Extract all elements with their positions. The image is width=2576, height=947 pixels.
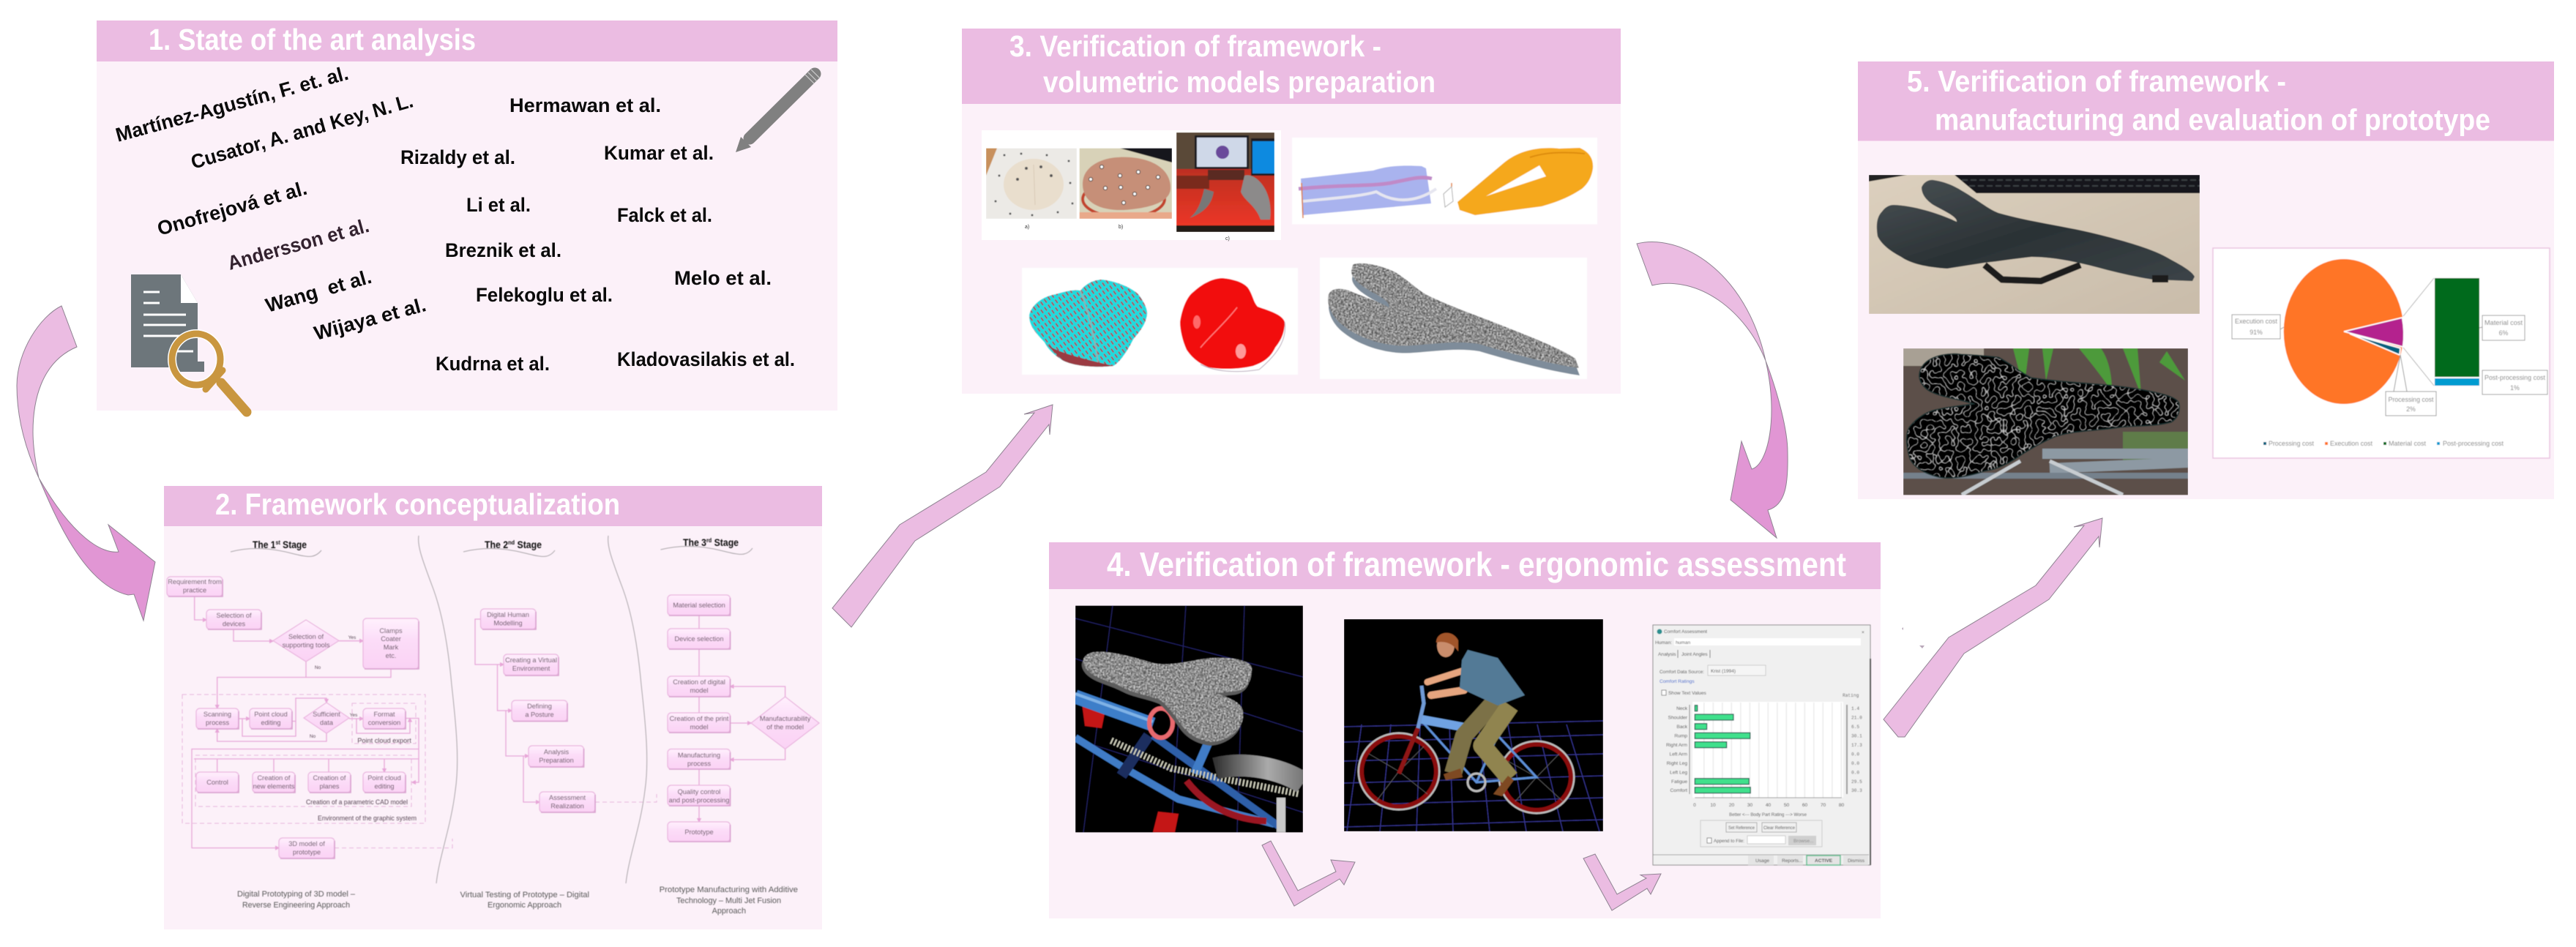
screenshot: comfort assessment window: 60 — [1802, 803, 1807, 808]
chart: cost breakdown pie with bar of pie — [2213, 248, 2550, 458]
screenshot: comfort assessment window: 29.5 — [1851, 779, 1862, 785]
screenshot: comfort assessment window: 50 — [1784, 803, 1789, 808]
photo c: scanner setup with monitors — [1176, 132, 1274, 232]
cited authors: Cusator, A. and Key, N. L. — [188, 89, 416, 173]
screenshot: comfort assessment window: Back — [1676, 725, 1688, 730]
screenshot: comfort assessment window: 17.3 — [1851, 743, 1862, 748]
cited authors: Felekoglu et al. — [476, 284, 613, 306]
stage 1: No — [315, 665, 321, 670]
stage 3: and post-processing — [669, 796, 729, 804]
cited authors: Kumar et al. — [604, 142, 714, 164]
screenshot: comfort assessment window: Set Reference — [1728, 826, 1755, 831]
stage 1: Coater — [381, 635, 401, 643]
screenshot: comfort assessment window: human — [1676, 640, 1690, 645]
stage 2 — [460, 539, 657, 910]
cited authors: Hermawan et al. — [509, 94, 661, 116]
panel 2: framework conceptualization — [164, 486, 822, 929]
stage 3: Prototype Manufacturing with Additive — [660, 886, 798, 894]
stage 1: Scanning — [204, 711, 231, 718]
pie slices — [2284, 259, 2404, 404]
screenshot: comfort assessment window: 20 — [1729, 803, 1734, 808]
stray arrow fragments — [1902, 627, 1924, 648]
cited authors: Martínez-Agustín, F. et. al. — [113, 62, 351, 146]
stage 1: etc. — [386, 652, 396, 659]
screenshot: comfort assessment window: Clear Reference — [1763, 826, 1795, 831]
stage 1: editing — [261, 719, 281, 726]
arrow: small bent arrow 1 — [1262, 841, 1355, 906]
stage 3 — [660, 537, 819, 916]
stage 1: planes — [319, 783, 340, 790]
screenshot: comfort assessment window: Neck — [1676, 706, 1688, 711]
cited authors: Breznik et al. — [445, 239, 561, 261]
stage 2: nd — [508, 539, 515, 546]
stage 2: Virtual Testing of Prototype – Digital — [460, 891, 589, 899]
stage 1: conversion — [368, 719, 400, 726]
screenshot: comfort assessment window: Comfort Ratings — [1660, 679, 1695, 684]
screenshot: comfort assessment window: Right Arm — [1666, 743, 1688, 748]
screenshot: comfort assessment window: 30 — [1747, 803, 1752, 808]
data callouts: 1% — [2510, 384, 2520, 392]
stage 2: Stage — [515, 539, 542, 550]
figure: grey lattice saddle model — [1320, 258, 1587, 379]
data callouts: 6% — [2499, 329, 2509, 337]
stage 3: of the model — [766, 723, 804, 730]
stage 2: Defining — [527, 703, 552, 710]
screenshot: comfort assessment window: Comfort Data Source: — [1660, 670, 1704, 675]
stage 1 — [167, 539, 452, 910]
stage 1: Point cloud — [367, 774, 401, 782]
stage 1: Control — [206, 779, 228, 786]
stage 1: prototype — [293, 849, 321, 856]
stage 3: Quality control — [678, 788, 720, 796]
cited authors: Falck et al. — [617, 204, 712, 226]
screenshot: comfort assessment window: 10 — [1710, 803, 1716, 808]
figure: cyan mesh and red shell — [1022, 268, 1298, 375]
stage 1: The 1 — [253, 539, 278, 550]
screenshot: comfort assessment window: 21.0 — [1851, 716, 1862, 720]
panel 3 heading bar: volumetric models preparation — [1043, 65, 1436, 99]
stage 1: Creation of a parametric CAD model — [306, 798, 408, 806]
divider between stage 1 and 2 — [419, 536, 458, 883]
stage 3: Technology – Multi Jet Fusion — [676, 897, 781, 905]
stage 2: Environment — [512, 665, 550, 672]
figure: CAD block and orange saddle — [1292, 138, 1597, 224]
stage 2: a Posture — [525, 711, 554, 719]
stage 1: Yes — [350, 713, 358, 718]
screenshot: comfort assessment window — [1653, 625, 1870, 865]
arrow: curved arrow from panel 1 to panel 2 — [17, 306, 155, 621]
chart legend — [2263, 440, 2504, 447]
stage 3: model — [690, 723, 709, 730]
stage 1: Point cloud — [254, 711, 288, 718]
stage 1: Sufficient — [313, 711, 340, 718]
comfort rating bars — [1695, 705, 1750, 793]
stage 2: Preparation — [539, 757, 574, 764]
chart legend: Material cost — [2389, 440, 2427, 447]
screenshot: comfort assessment window: 0.0 — [1851, 770, 1859, 776]
screenshot: comfort assessment window: Rating — [1843, 693, 1859, 698]
screenshot: comfort assessment window: 30.3 — [1851, 788, 1862, 793]
stage 1: Environment of the graphic system — [318, 815, 417, 822]
arrow: panel 2 to panel 3 — [832, 405, 1053, 627]
screenshot: comfort assessment window: 0.0 — [1851, 761, 1859, 766]
screenshot: comfort assessment window: Left Leg — [1670, 770, 1687, 776]
panel 3: volumetric models preparation — [962, 29, 1621, 394]
data callouts: 91% — [2250, 329, 2263, 336]
stage 1: Requirement from — [168, 578, 222, 585]
stage 1: data — [320, 719, 334, 726]
cited authors: Onofrejová et al. — [155, 177, 310, 240]
stage 2: Ergonomic Approach — [488, 901, 561, 910]
stage 3: rd — [706, 537, 712, 544]
cited authors: Melo et al. — [674, 267, 772, 289]
stage 1: 3D model of — [288, 840, 325, 847]
stage 3: Creation of the print — [670, 715, 729, 722]
screenshot: comfort assessment window: 1.4 — [1851, 706, 1859, 711]
icon: document and magnifying glass — [131, 274, 247, 412]
stage 1: Clamps — [379, 627, 403, 635]
panel 3 heading bar — [962, 29, 1621, 104]
cited authors: Rizaldy et al. — [400, 146, 515, 168]
stage 1: process — [206, 719, 229, 726]
photo: smooth black saddle on desk — [1869, 175, 2200, 314]
flowchart: three stages — [167, 536, 819, 916]
icon: pencil — [736, 70, 820, 152]
stage 1: Stage — [280, 539, 307, 550]
panel 4: ergonomic assessment — [1049, 542, 1881, 918]
screenshot: comfort assessment window: × — [1862, 630, 1864, 635]
stage 1: devices — [223, 621, 245, 628]
cited authors: Wijaya et al. — [312, 293, 428, 345]
stage 3: The 3 — [683, 537, 709, 548]
data callouts — [2232, 315, 2547, 416]
arrow: small bent arrow 2 — [1583, 854, 1661, 910]
panel 1: state of the art analysis — [97, 20, 837, 412]
screenshot: comfort assessment window: Shoulder — [1668, 716, 1688, 720]
divider between stage 2 and 3 — [608, 536, 647, 883]
chart legend: Execution cost — [2330, 440, 2373, 447]
screenshot: comfort assessment window: Dismiss — [1848, 858, 1865, 864]
stage 3: Approach — [712, 907, 746, 916]
stage 3: Manufacturability — [760, 715, 811, 722]
screenshot: comfort assessment window: Krist (1994) — [1711, 669, 1736, 674]
screenshot: comfort assessment window: Browse... — [1793, 839, 1814, 844]
stage 1: Creation of — [313, 774, 346, 782]
stage 1: Selection of — [288, 633, 324, 640]
stage 1: Creation of — [258, 774, 291, 782]
screenshot: comfort assessment window: 30.1 — [1851, 733, 1862, 739]
stage 1: Digital Prototyping of 3D model – — [237, 890, 356, 899]
stage 3: Material selection — [673, 602, 725, 609]
stage 3: model — [690, 686, 709, 694]
data callouts: Execution cost — [2235, 318, 2278, 325]
screenshot: comfort assessment window: Fatigue — [1671, 779, 1687, 785]
stacked bar of pie — [2403, 278, 2479, 386]
stage 1: Yes — [348, 635, 356, 640]
image: digital human riding bicycle — [1344, 619, 1603, 831]
screenshot: comfort assessment window: Rump — [1674, 733, 1687, 739]
arrow: panel 4 to panel 5 — [1884, 518, 2102, 737]
photo a: saddle mould on marker sheet — [986, 148, 1077, 219]
stage 3: Device selection — [675, 635, 723, 643]
stage 3: Manufacturing — [678, 752, 720, 759]
screenshot: comfort assessment window: Right Leg — [1667, 761, 1687, 766]
stage 1: Point cloud export — [357, 737, 411, 744]
data callouts: 2% — [2406, 405, 2416, 413]
screenshot: comfort assessment window: ACTIVE — [1815, 858, 1833, 864]
stage 1: Format — [373, 711, 395, 718]
stage 3: Creation of digital — [673, 678, 725, 686]
screenshot: comfort assessment window: Analysis — [1658, 652, 1676, 657]
stage 1: st — [275, 539, 280, 546]
stage 2: Creating a Virtual — [505, 656, 557, 664]
screenshot: comfort assessment window: Usage — [1755, 858, 1769, 864]
figure: scanning photos a, b, c: b) — [1119, 225, 1123, 230]
stage 2: Digital Human — [487, 611, 529, 618]
screenshot: comfort assessment window: Left Arm — [1669, 752, 1687, 757]
screenshot: comfort assessment window: 70 — [1821, 803, 1826, 808]
image: saddle mounted on bicycle frame — [1075, 605, 1303, 833]
cited authors — [113, 62, 795, 375]
figure: scanning photos a, b, c: a) — [1025, 225, 1029, 230]
data callouts: Processing cost — [2388, 396, 2434, 403]
stage 2: The 2 — [485, 539, 510, 550]
screenshot: comfort assessment window: Reports... — [1782, 858, 1803, 864]
stage 1: supporting tools — [283, 641, 330, 648]
cited authors: Wang et al. — [263, 266, 374, 317]
figure: scanning photos a, b, c — [982, 130, 1281, 242]
stage 2: Assessment — [549, 794, 586, 801]
screenshot: comfort assessment window: Human: — [1655, 640, 1672, 645]
figure: scanning photos a, b, c: c) — [1225, 236, 1230, 242]
cited authors: Kudrna et al. — [436, 353, 550, 375]
stage 1: Reverse Engineering Approach — [242, 901, 350, 910]
cited authors: Andersson et al. — [225, 214, 371, 274]
stage 1: practice — [183, 587, 206, 594]
stage 1: Selection of — [216, 612, 252, 619]
panel 2 heading bar — [164, 486, 822, 526]
cited authors: Kladovasilakis et al. — [617, 348, 795, 370]
photo b: painted saddle mould with targets — [1079, 148, 1172, 219]
stage 1: Mark — [384, 644, 399, 651]
stage 3: process — [687, 760, 711, 767]
screenshot: comfort assessment window: 80 — [1839, 803, 1844, 808]
screenshot: comfort assessment window: 40 — [1766, 803, 1771, 808]
chart legend: Processing cost — [2269, 440, 2315, 447]
panel 1 heading bar: 1. State of the art analysis — [149, 23, 476, 56]
screenshot: comfort assessment window: Better <--- Body Part Rating ---> Worse — [1729, 812, 1807, 817]
screenshot: comfort assessment window: Show Text Values — [1668, 691, 1707, 696]
screenshot: comfort assessment window: Comfort Assessment — [1664, 629, 1707, 635]
screenshot: comfort assessment window: Joint Angles — [1681, 652, 1708, 657]
data callouts: Post-processing cost — [2484, 374, 2546, 381]
photo: lattice saddle on bicycle — [1903, 348, 2188, 495]
arrow: curved arrow from panel 3 to panel 4 — [1637, 242, 1788, 538]
screenshot: comfort assessment window: Append to File: — [1714, 839, 1744, 844]
panel 5 heading bar: 5. Verification of framework - — [1907, 64, 2286, 98]
panel 5 heading bar: manufacturing and evaluation of prototype — [1935, 102, 2490, 136]
stage 3: Stage — [712, 537, 739, 548]
stage 1: No — [310, 734, 316, 739]
screenshot: comfort assessment window: 0.0 — [1851, 752, 1859, 757]
stage 2: Realization — [550, 802, 584, 809]
panel 1 heading bar — [97, 20, 837, 61]
stage 1: new elements — [253, 783, 295, 790]
stage 2: Modelling — [493, 619, 523, 626]
screenshot: comfort assessment window: Comfort — [1670, 788, 1687, 793]
data callouts: Material cost — [2484, 319, 2523, 326]
stage 2: Analysis — [544, 748, 570, 755]
screenshot: comfort assessment window: 0 — [1693, 803, 1696, 808]
panel 3 heading bar: 3. Verification of framework - — [1009, 29, 1381, 63]
screenshot: comfort assessment window: 6.5 — [1851, 725, 1859, 730]
chart legend: Post-processing cost — [2443, 440, 2504, 447]
stage 3: Prototype — [684, 828, 714, 836]
panel 5 heading bar — [1858, 61, 2554, 141]
cited authors: Li et al. — [466, 194, 531, 216]
panel 2 heading bar: 2. Framework conceptualization — [215, 487, 620, 521]
stage 1: editing — [374, 783, 395, 790]
panel 4 heading bar: 4. Verification of framework - ergonomic assessment — [1107, 545, 1846, 583]
panel 5: manufacturing and evaluation of prototype — [1858, 61, 2554, 499]
